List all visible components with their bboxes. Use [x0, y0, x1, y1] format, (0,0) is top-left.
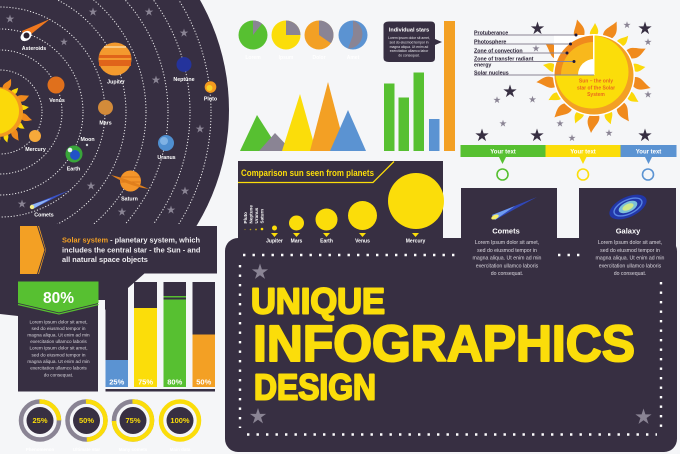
pie labels: Amet [347, 55, 360, 61]
donut: 75 percent [114, 402, 152, 440]
title: UNIQUE [251, 280, 385, 322]
rotated outer planet labels: Saturn [260, 209, 264, 224]
bar: 80 percent: 80% [167, 378, 183, 386]
legend: your text: Your text [570, 150, 596, 156]
sun caption: star of the Solar [577, 86, 615, 92]
planet labels: Venus [355, 238, 370, 244]
planet labels: Earth [67, 166, 80, 172]
planet labels: Uranus [157, 155, 176, 161]
icon: comet [491, 197, 537, 221]
icon: Uranus [158, 135, 174, 151]
icon: Earth [66, 146, 82, 162]
callout: individual stars: Individual stars [389, 28, 429, 34]
callout: individual stars: Lorem ipsum dolor sit amet, [388, 36, 430, 40]
panel: main dark backdrop [225, 161, 677, 452]
callout: individual stars: do consequat. [398, 54, 420, 58]
text block: magna aliqua. Ut enim ad min [473, 256, 542, 262]
description text: all natural space objects [62, 255, 148, 264]
icon: Venus [48, 76, 64, 94]
pointers [271, 233, 419, 237]
text block: do consequat. [491, 271, 523, 277]
panel: galaxy [596, 189, 665, 277]
heading: Comets [492, 226, 520, 236]
icon: sun [0, 77, 33, 148]
donut: 100 percent [161, 402, 199, 440]
donut: 50 percent: 50% [79, 416, 94, 425]
legend: your text: Your text [636, 150, 661, 156]
text block: Lorem Ipsum dolor sit amet, [598, 240, 662, 246]
sun layer labels: Photosphere [474, 40, 506, 46]
text block: sed do eiusmod tempor in [32, 326, 86, 331]
planet labels: Mercury [406, 238, 425, 244]
text block [596, 240, 665, 277]
bar backgrounds [106, 282, 215, 387]
sun layer labels: Zone of transfer radiant [474, 56, 534, 62]
pie labels: Lorem [245, 55, 261, 61]
title: DESIGN [254, 366, 376, 408]
icon: galaxy [606, 189, 650, 225]
frame stars [250, 264, 652, 424]
pie charts [238, 20, 368, 61]
donut labels: Ultimate star [73, 447, 100, 452]
description text: Solar system - planetary system, which [62, 236, 201, 244]
icon: Pluto [205, 81, 216, 93]
callout: individual stars: sed do eiusmod tempor in [389, 40, 429, 44]
sun caption [577, 78, 615, 98]
legend: your text [460, 145, 676, 180]
rotated outer planet labels: Neptune [248, 205, 254, 224]
icon: Moon [86, 144, 88, 146]
description text: includes the central star - the Sun - and [62, 246, 201, 254]
ribbon underline [18, 304, 98, 314]
leader points [566, 34, 578, 63]
planet labels: Jupiter [266, 238, 283, 244]
pie: orange [304, 20, 334, 50]
donut labels [26, 447, 191, 452]
title: INFOGRAPHICS [253, 315, 635, 372]
orbits [0, 0, 212, 224]
donut charts [21, 402, 199, 452]
stars [475, 21, 652, 141]
baseline [106, 389, 215, 392]
text block: magna aliqua. Ut enim ad min [27, 332, 90, 338]
text block: do consequat. [44, 372, 73, 378]
panel: comparison sun seen from planets [238, 162, 444, 244]
text block [473, 240, 542, 277]
text block: exercitation ullamco laboris [599, 264, 662, 270]
rotated outer planet labels [243, 205, 264, 224]
heading rule [238, 162, 394, 182]
diagram: sun structure [474, 18, 652, 141]
donut: 50 percent [68, 402, 106, 440]
pie: blue [338, 20, 368, 50]
planet labels: Mercury [25, 147, 46, 153]
text block: sed do eiusmod tempor in [32, 352, 86, 358]
text block: exercitation ullamco laboris [476, 264, 539, 270]
panel: comets [473, 197, 542, 277]
text block: exercitation ullamco laboris [30, 339, 87, 344]
planet labels [22, 46, 218, 218]
planet labels: Mars [291, 238, 303, 244]
text block: Lorem Ipsum dolor sit amet, [29, 346, 88, 350]
rotated outer planet labels: Uranus [254, 207, 259, 224]
pie: yellow [272, 20, 300, 50]
sun circles [244, 173, 444, 230]
sun layer labels: Zone of convection [474, 48, 523, 54]
planet labels: Earth [320, 238, 333, 244]
text block: do consequat. [614, 271, 646, 277]
icon: Saturn [111, 170, 149, 192]
pie: green [238, 20, 268, 50]
card [18, 282, 98, 392]
planet labels: Jupiter [107, 80, 125, 86]
rotated outer planet labels: Pluto [243, 212, 248, 224]
panel: 80 percent text card [18, 282, 98, 392]
pie labels: Ipsum [279, 55, 294, 61]
sun caption: System [587, 92, 605, 98]
sun layer labels [474, 30, 534, 76]
donut labels: Many comets [119, 447, 148, 452]
text block: sed do eiusmod tempor in [600, 248, 660, 254]
title [251, 280, 635, 408]
percentage: 80% [43, 290, 74, 307]
planet labels: Asteroids [22, 46, 46, 52]
sun layer labels: Protuberance [474, 30, 508, 36]
planet labels: Comets [34, 212, 54, 218]
donut labels: Phenomenon [26, 447, 54, 452]
callout: individual stars: exercitation ullamco labor [390, 49, 429, 53]
text block: magna aliqua. Ut enim ad min [27, 359, 90, 364]
callout: individual stars [384, 22, 442, 62]
icon: comet [30, 190, 70, 209]
green ribbon [18, 282, 98, 312]
sun disc [553, 34, 635, 116]
flames [536, 18, 652, 133]
sun caption: Sun – the only [579, 78, 613, 84]
text block: magna aliqua. Ut enim ad min [596, 256, 665, 262]
planet labels: Mars [99, 120, 112, 126]
donut: 25 percent [21, 402, 59, 440]
pie labels [245, 55, 360, 61]
bar: 75 percent: 75% [138, 378, 153, 386]
icon: orange arrow [20, 226, 46, 274]
sun layer labels: Solar nucleus [474, 70, 509, 76]
donut: 100 percent: 100% [170, 416, 190, 425]
legend: your text: Your text [490, 150, 516, 156]
background stars [6, 8, 204, 216]
description text [62, 236, 201, 264]
bar: 25 percent: 25% [109, 378, 125, 386]
bar: 50 percent: 50% [196, 378, 212, 386]
text block [27, 320, 90, 378]
sun layer labels: energy [474, 62, 491, 68]
planet labels: Saturn [121, 196, 138, 202]
icon: Jupiter [98, 42, 132, 76]
heading: Comparison sun seen from planets [241, 168, 374, 178]
donut labels: Main data [170, 447, 191, 452]
panel: solar system [0, 0, 229, 333]
icon: Mercury [29, 130, 41, 142]
planet labels: Pluto [204, 96, 218, 102]
planet labels: Moon [80, 137, 95, 143]
icon: asteroid [19, 19, 50, 43]
percent bar chart [106, 282, 215, 392]
text block: sed do eiusmod tempor in [477, 248, 537, 254]
planet labels: Venus [49, 98, 65, 104]
icon: Mars [98, 100, 113, 115]
planet labels [266, 238, 425, 244]
heading: Galaxy [616, 226, 641, 236]
text block: exercitation ullamco laboris [30, 366, 87, 370]
donut: 25 percent: 25% [32, 416, 48, 425]
sun layer leader lines [474, 35, 594, 75]
pie labels: Dolor [312, 55, 326, 61]
text block: Lorem Ipsum dolor sit amet, [475, 240, 539, 246]
donut: 75 percent: 75% [125, 416, 141, 425]
banner [18, 226, 217, 274]
planet labels: Neptune [173, 77, 195, 83]
callout: individual stars: magna aliqua. Ut enim ad [390, 45, 428, 49]
mountain chart [240, 82, 366, 151]
text block: Lorem Ipsum dolor sit amet, [29, 320, 88, 324]
icon: Neptune [176, 57, 192, 72]
dotted frame [240, 255, 661, 434]
bar chart: individual stars [384, 21, 455, 151]
panel: solar system description [18, 226, 217, 274]
